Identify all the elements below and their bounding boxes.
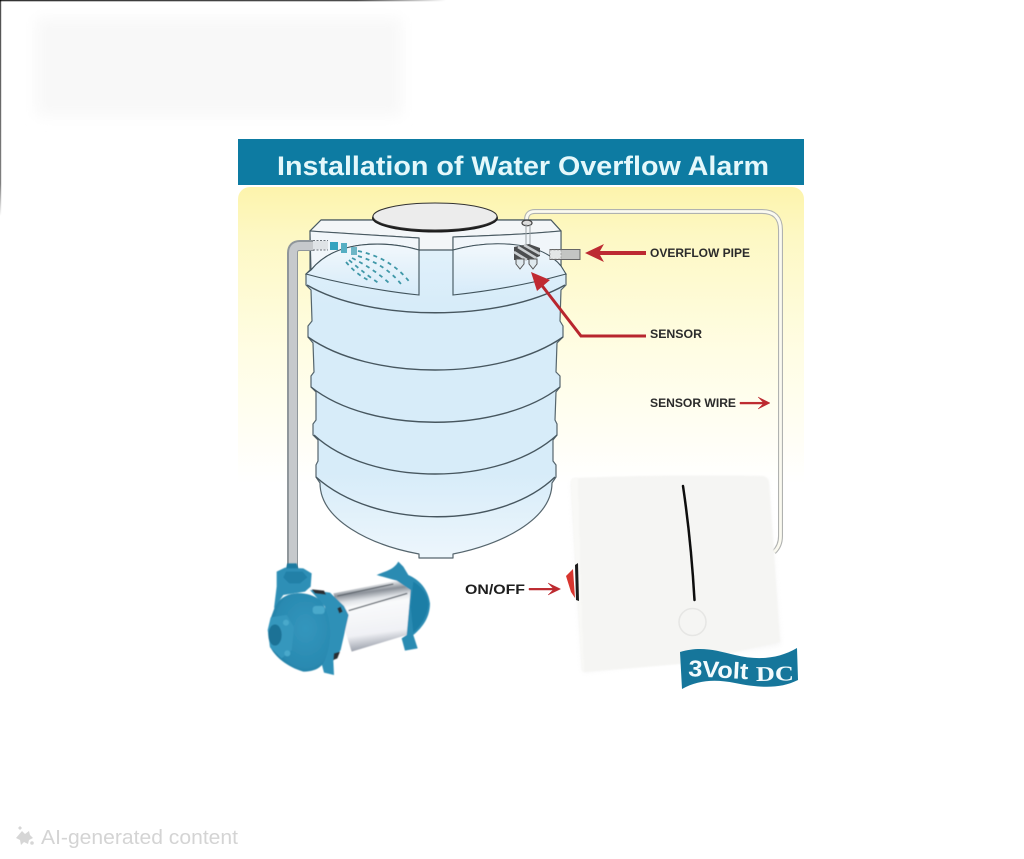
banner text: DC [756,661,794,686]
water pump [268,562,430,675]
pump inlet hole [268,624,282,646]
top-left scan edge lines [0,0,446,216]
pump end cap shade [411,582,428,633]
sensor wire [526,212,780,552]
pump steel cylinder [333,581,411,652]
pump neck top face [283,572,307,583]
title: Installation of Water Overflow Alarm [277,151,769,181]
label: overflow pipe: OVERFLOW PIPE [650,248,750,260]
icon: sparkle watermark [16,826,34,845]
tank shoulder right [453,231,561,270]
tank shoulder left [310,231,419,270]
voltage banner [680,648,798,689]
arrow: sensor wire [740,397,770,409]
tank body [306,220,566,558]
tank right window [453,244,566,295]
tank left window [306,244,419,295]
banner text: 3Volt [688,655,749,684]
pump end cap [377,562,430,651]
box round button [679,608,706,636]
label: sensor wire: SENSOR WIRE [650,398,736,410]
tank ribs [307,285,565,517]
label: on/off: ON/OFF [465,582,525,597]
arrow: on/off [529,583,560,595]
pump bolts [283,606,325,656]
pump volute [268,593,330,672]
box left edge [571,478,584,672]
box shadow [572,480,780,672]
pump neck stem [286,563,298,568]
overflow pipe [550,250,580,260]
watermark text: AI-generated content [41,827,238,849]
sensor body [514,244,540,260]
pump neck [274,568,312,608]
spray of water [330,242,411,285]
label: sensor: SENSOR [650,329,703,341]
water tank [306,203,566,558]
sensor wire entry hole [522,220,532,226]
pump inlet flange [268,615,294,658]
on/off switch [566,563,579,601]
inlet pipe [292,240,328,570]
pump flange [310,590,349,675]
banner text [688,655,794,686]
panel: yellow diagram background [238,187,804,517]
sensor probes [516,259,537,269]
pump cylinder ridges [337,584,407,611]
title banner [238,139,804,185]
blurred redacted area [36,18,402,116]
tank cap top surface [310,220,561,250]
sensor [514,220,540,269]
box front [571,475,780,672]
arrow: sensor [531,272,646,336]
tank lid [372,203,498,232]
control box [566,475,780,672]
banner ribbon [680,648,798,689]
arrow: overflow pipe [585,244,646,262]
box slit [683,486,694,600]
pump flange dark bolts [312,589,343,660]
